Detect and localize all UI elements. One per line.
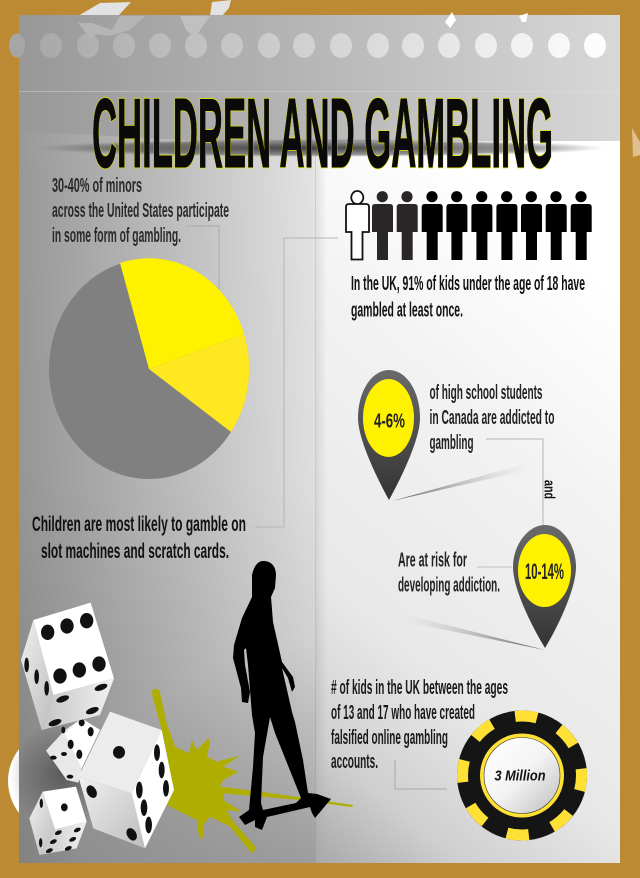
text: 30-40% of minors: [52, 175, 229, 247]
icon row: ten people: [346, 191, 592, 260]
text: Canada: [430, 382, 554, 454]
infographic canvas: developing addiction.: [398, 574, 500, 596]
top band with punched holes: [9, 12, 620, 141]
map pin: 10-14%: [513, 525, 576, 648]
paper panel: [19, 131, 620, 863]
text: UK kids falsified accounts: [331, 677, 508, 773]
die: small middle: [46, 718, 100, 783]
text: UK kids falsified accounts: of 13 and 17 who have created: [331, 702, 475, 724]
leader line: accounts to chip: [395, 760, 447, 789]
leader line: at risk: [477, 566, 512, 568]
silhouette: boy on skateboard: [233, 561, 331, 830]
text: UK kids falsified accounts: falsified online gambling: [331, 727, 448, 749]
text: slot machines: Children are most likely to gamble on: [32, 513, 246, 536]
map pin: 10-14%: 10-14%: [525, 559, 564, 584]
yellow paint splat: [152, 688, 353, 853]
dice group: [21, 603, 174, 855]
shadow behind dice: [10, 720, 114, 830]
pie chart: [49, 258, 249, 479]
text: at risk: Are at risk for: [398, 550, 467, 572]
poker chip: 3 Million: [456, 710, 588, 841]
text: at risk: [398, 550, 500, 596]
connector with "and": and: [540, 480, 558, 499]
pin shadow 1: [392, 461, 537, 501]
white person: [346, 191, 369, 260]
map pin: 4-6%: [358, 370, 420, 500]
text: 30-40% of minors: across the United States participate: [52, 200, 229, 222]
die: small bottom: [29, 787, 87, 855]
die: large one pip: [78, 712, 174, 848]
title shadow: [35, 139, 605, 157]
text: slot machines: slot machines and scratch cards.: [41, 540, 229, 563]
text: UK 91%: [351, 273, 585, 322]
text: UK 91%: gambled at least once.: [351, 300, 463, 322]
leader line: minors to pie: [186, 226, 219, 305]
white crescent at left edge: [8, 729, 112, 833]
text: 30-40% of minors: 30-40% of minors: [52, 175, 142, 197]
die: six on top: [21, 603, 114, 730]
torn paper scraps on border: [78, 0, 231, 16]
text: Canada: gambling: [430, 432, 474, 454]
poker chip: 3 Million: 3 Million: [494, 768, 546, 784]
text: UK kids falsified accounts: accounts.: [331, 751, 378, 773]
pin shadow 2: [392, 611, 545, 650]
text: 30-40% of minors: in some form of gambling.: [52, 225, 181, 247]
nine black people: [372, 191, 592, 260]
text: slot machines: [32, 513, 246, 563]
pale shape on right edge: [632, 128, 640, 157]
leader line: slot machines to people: [255, 238, 338, 527]
connector with "and": [486, 439, 558, 525]
map pin: 4-6%: 4-6%: [374, 410, 405, 432]
